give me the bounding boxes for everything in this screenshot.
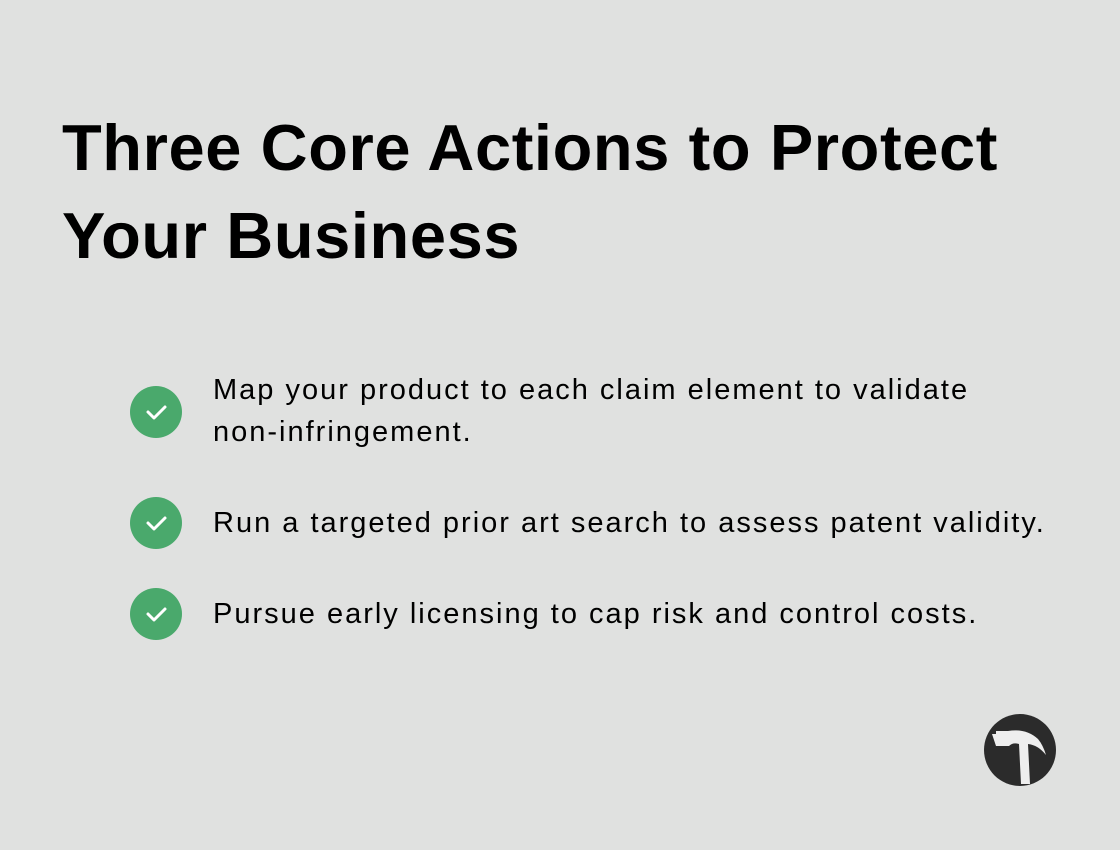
text: non-infringement. (213, 416, 473, 448)
text (213, 374, 969, 448)
title: Your Business (62, 199, 520, 272)
text: Run a targeted prior art search to assess patent validity. (213, 507, 1046, 539)
icon: check (130, 386, 182, 438)
title (62, 111, 998, 272)
icon: check (130, 588, 182, 640)
title: Three Core Actions to Protect (62, 111, 998, 184)
item 3 (130, 588, 978, 640)
icon: hammer logo (984, 714, 1056, 786)
item 2 (130, 497, 1046, 549)
text: Pursue early licensing to cap risk and control costs. (213, 598, 978, 630)
icon: check (130, 497, 182, 549)
item 1 (130, 374, 969, 448)
text: Map your product to each claim element to validate (213, 374, 969, 406)
